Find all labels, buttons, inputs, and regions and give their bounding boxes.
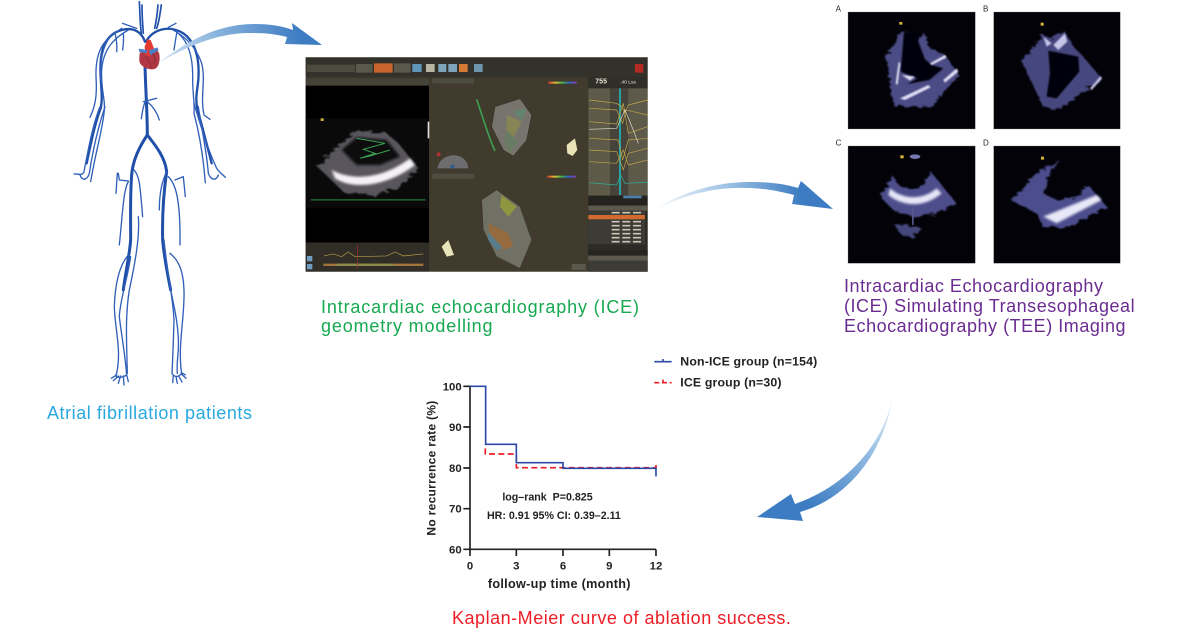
legend: Non-ICE group (n=154) [680, 355, 817, 369]
arrow: modelling to TEE imaging [650, 181, 833, 213]
curve: Non-ICE group [470, 386, 656, 476]
image D: D [983, 139, 989, 148]
panel: ICE ultrasound images [836, 5, 1120, 263]
arrow: TEE imaging to survival curve [757, 395, 893, 521]
label: patients: Atrial fibrillation patients [47, 403, 252, 423]
y axis ticks: 100 [443, 381, 462, 393]
arrow: patients to ICE modelling [158, 23, 322, 63]
ultrasound view [306, 78, 429, 243]
axes [463, 386, 656, 556]
x axis ticks: 0 [467, 560, 473, 572]
y axis ticks: 70 [449, 504, 462, 516]
image C [836, 139, 975, 263]
label: ICE geometry modelling: Intracardiac echocardiography (ICE) [321, 297, 640, 317]
y axis ticks: 60 [449, 544, 462, 556]
label: Kaplan-Meier: Kaplan-Meier curve of ablation success. [452, 608, 791, 628]
illustration: human venous system [74, 2, 225, 385]
branch veins [74, 23, 225, 385]
x axis ticks: 9 [606, 560, 612, 572]
ECG strip [306, 243, 429, 272]
label: ICE simulating TEE imaging: (ICE) Simulating Transesophageal [844, 296, 1135, 316]
label: ICE simulating TEE imaging: Echocardiography (TEE) Imaging [844, 316, 1126, 336]
label: ICE simulating TEE imaging: Intracardiac Echocardiography [844, 276, 1104, 296]
electrogram panel [588, 77, 648, 205]
statistics: HR: 0.91 95% CI: 0.39–2.11 [487, 510, 621, 522]
y axis ticks [443, 381, 462, 556]
legend [654, 355, 817, 390]
electrogram panel: .40 Lss [620, 80, 637, 86]
y axis title: No recurrence rate (%) [424, 400, 438, 536]
icon: heart [139, 39, 160, 69]
x axis title: follow-up time (month) [488, 577, 631, 591]
chart: Kaplan-Meier curve [424, 355, 817, 591]
x axis ticks: 12 [650, 560, 662, 572]
x axis ticks [467, 560, 662, 572]
x axis ticks: 3 [513, 560, 519, 572]
statistics: log–rank P=0.825 [502, 492, 593, 504]
y axis ticks: 90 [449, 422, 462, 434]
panel: ICE mapping software screenshot [306, 57, 648, 272]
image B [983, 5, 1120, 129]
y axis ticks: 80 [449, 463, 462, 475]
legend: ICE group (n=30) [680, 376, 782, 390]
x axis ticks: 6 [560, 560, 566, 572]
point list table [588, 205, 648, 272]
electrogram panel: 755 [595, 79, 607, 86]
software toolbar [306, 57, 648, 77]
label: ICE geometry modelling: geometry modelling [321, 316, 493, 336]
image A: A [836, 5, 842, 14]
image D [983, 139, 1120, 263]
image A [836, 5, 975, 129]
image B: B [983, 5, 988, 14]
statistics [487, 492, 621, 522]
curve: ICE group [485, 448, 656, 468]
3D atrium models [430, 78, 588, 272]
colour scales [547, 82, 577, 178]
main veins [87, 2, 212, 290]
image C: C [836, 139, 842, 148]
